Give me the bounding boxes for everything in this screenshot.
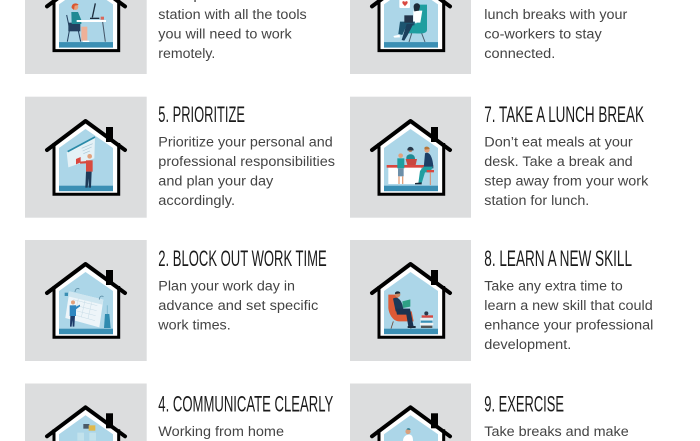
body text: tip 7: step away from your work: [484, 174, 649, 190]
panel: tip 4 communicate clearly: [25, 384, 333, 441]
panel: tip 2 block out work time: [25, 240, 327, 361]
body text: tip 8: development.: [484, 337, 571, 353]
heading: 9. Exercise: 9. EXERCISE: [484, 392, 564, 417]
body text: tip 3: lunch breaks with your: [484, 7, 628, 23]
body text: tip 9: Take breaks and make: [484, 424, 629, 440]
icon: house with person and calendar: [47, 264, 125, 337]
body text: tip 2: work times.: [157, 318, 231, 334]
body text: tip 7: desk. Take a break and: [484, 154, 633, 170]
body text: tip 4: Working from home: [158, 424, 284, 440]
tile: prioritize: [25, 97, 147, 218]
body text: tip 7: station for lunch.: [484, 193, 589, 209]
body text: tip 2: Plan your work day in: [158, 278, 295, 294]
panel: tip 7 lunch break: [350, 97, 652, 218]
body text: tip 3: connected.: [484, 46, 555, 62]
icon: house with woman in armchair: [372, 0, 450, 51]
panel: tip 9 exercise: [350, 384, 629, 441]
heading: 2. Block out work time: 2. BLOCK OUT WORK TIME: [158, 246, 327, 271]
tile: communicate clearly: [25, 384, 147, 441]
body text: tip 1: remotely.: [158, 46, 215, 62]
heading: 4. Communicate clearly: 4. COMMUNICATE CLEARLY: [158, 392, 333, 417]
icon: house with video call: [47, 407, 125, 441]
panel: tip 3 stay connected: [350, 0, 631, 74]
panel: tip 5 prioritize: [25, 97, 339, 218]
tile: work station: [25, 0, 147, 74]
panel: tip 8 learn a new skill: [350, 240, 657, 361]
tile: exercise: [350, 384, 471, 441]
tile: stay connected: [350, 0, 471, 74]
tile: block out work time: [25, 240, 147, 361]
body text: tip 5: and plan your day: [158, 174, 274, 190]
icon: house with man reading in armchair: [372, 264, 450, 337]
icon: house with person at desk: [47, 0, 125, 51]
icon: house with family at kitchen counter: [372, 121, 450, 194]
icon: house with person exercising: [372, 407, 450, 441]
body text: tip 5: Prioritize your personal and: [158, 135, 333, 151]
body text: tip 1: you will need to work: [158, 26, 293, 42]
body text: tip 3: co-workers to stay: [484, 26, 603, 42]
body text: tip 1: station with all the tools: [158, 7, 307, 23]
panel: tip 1 work station: [25, 0, 311, 74]
body text: tip 8: Take any extra time to: [484, 278, 623, 294]
body text: tip 7: Don’t eat meals at your: [484, 135, 633, 151]
body text: tip 8: enhance your professional: [484, 318, 653, 334]
body text: tip 8: learn a new skill that could: [484, 298, 653, 314]
tile: lunch break: [350, 97, 471, 218]
body text: tip 5: accordingly.: [158, 193, 235, 209]
icon: house with person at planning board: [47, 121, 125, 194]
body text: tip 2: advance and set specific: [158, 298, 318, 314]
heading: 5. Prioritize: 5. PRIORITIZE: [158, 102, 245, 127]
body text: tip 5: professional responsibilities: [158, 154, 335, 170]
tile: learn a new skill: [350, 240, 471, 361]
